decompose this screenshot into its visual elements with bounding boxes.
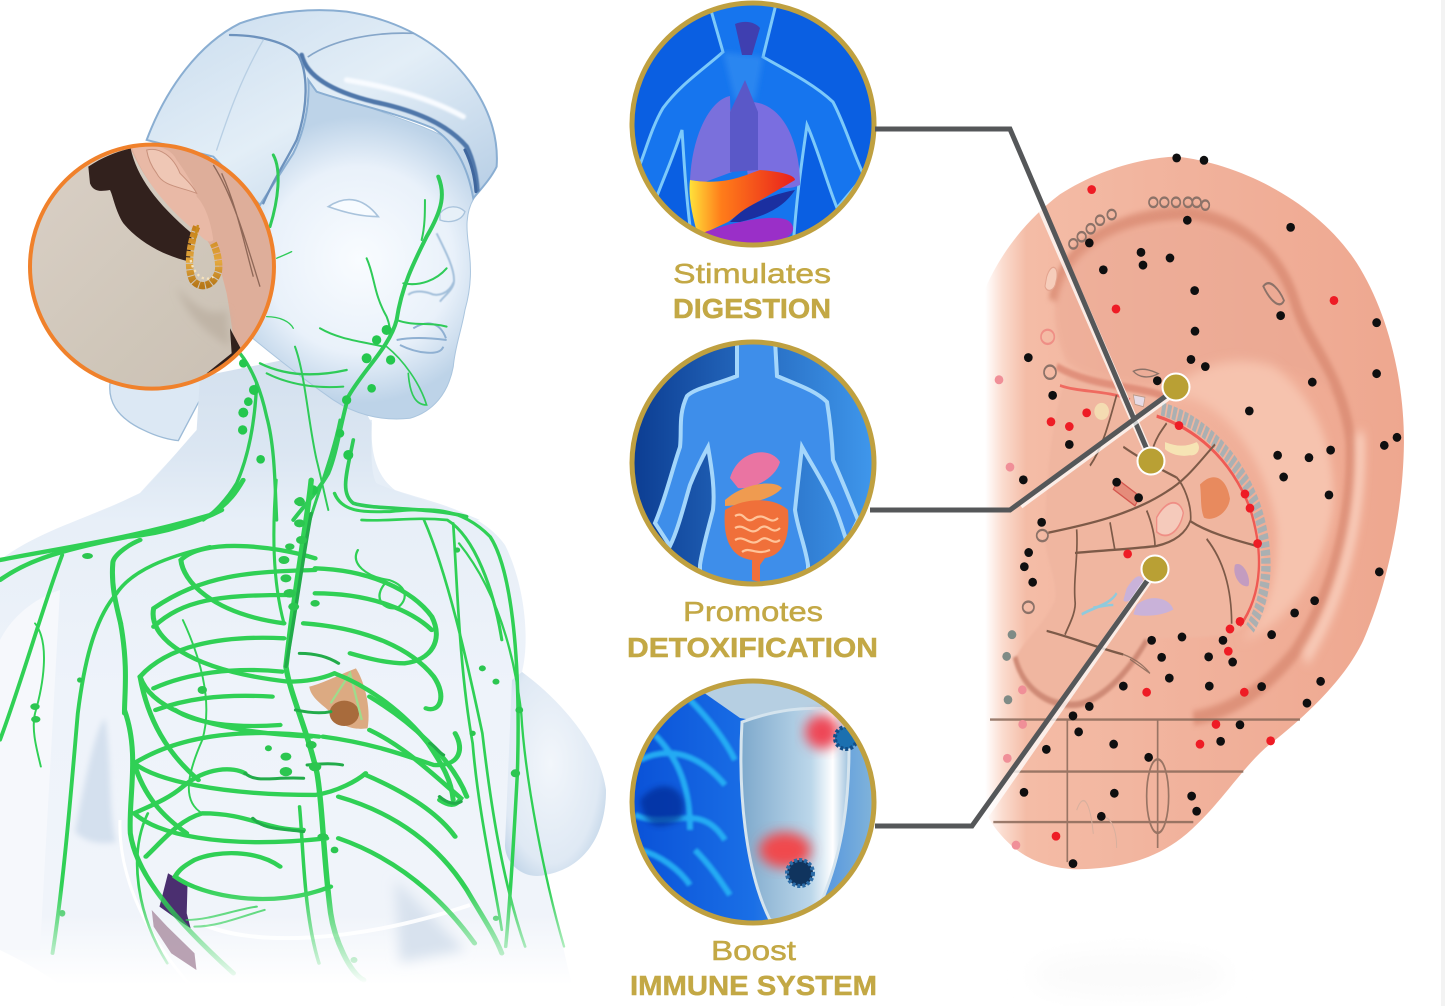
connector: detoxification to ear [870,393,1170,510]
virus particles [787,860,813,886]
outer ear in inset [132,145,213,242]
throat [735,22,760,55]
heading: Boost IMMUNE SYSTEM: IMMUNE SYSTEM [630,970,877,1001]
concha lower shade [1015,640,1147,705]
ear shape [970,157,1404,869]
face [247,67,474,419]
concha [1015,376,1264,706]
figure body silhouette [0,400,606,985]
heart [309,668,369,729]
heading: Promotes DETOXIFICATION: Promotes [683,596,823,627]
earring photo inset circle [30,143,280,389]
eye [328,200,465,222]
faint lobe sketch [1077,801,1117,848]
red glow [805,715,839,749]
hair [147,10,497,205]
wall shadow [182,297,229,342]
muscular torso strokes [635,700,735,895]
hair fold shadows [217,33,477,203]
ring markers [1023,198,1284,613]
gold ring [632,681,874,923]
heading: Stimulates DIGESTION [673,258,831,324]
torso silhouette [655,340,858,600]
ear acupoint chart [970,153,1404,869]
face and neck lymph nodes [238,325,395,506]
hair lock near neck [207,328,243,373]
gold ring [632,342,874,584]
antihelix body [1163,361,1334,640]
dark green vessel accents [245,513,461,832]
lymphatic network [0,480,564,980]
marker dot: immune point [1142,556,1168,582]
connector: immune system to ear [875,574,1152,826]
faded pink acupoints [995,375,1027,850]
torso silhouette [640,6,862,238]
chest lymph nodes [30,498,523,963]
marker dot: digestion point [1162,374,1190,400]
intestines [725,500,788,582]
medallion: detoxification [632,340,874,600]
chest lymph vessels [0,480,564,980]
illustration: female figure with lymphatic system [0,10,606,985]
ear zone lines [1047,395,1257,654]
heading: Boost IMMUNE SYSTEM: Boost [711,935,796,966]
connector: digestion to ear [875,129,1148,452]
heading: Promotes DETOXIFICATION [627,596,878,663]
stomach and intestines [704,218,794,242]
spleen patch [152,873,196,970]
hair bun behind neck [110,377,203,441]
nose shading [408,233,454,302]
medallion: digestion [632,0,874,250]
dark hair in inset [88,148,192,262]
gold ring [632,3,874,245]
marker dot: detox point [1138,448,1164,474]
medallion: immune system [632,680,874,925]
grey acupoints [1002,630,1016,704]
orange ring [30,145,274,389]
heading: Boost IMMUNE SYSTEM [630,935,877,1001]
heading: Stimulates DIGESTION: Stimulates [673,258,831,289]
face and neck lymph vessels [203,155,467,520]
loose hair strands [213,165,260,287]
heading: Stimulates DIGESTION: DIGESTION [673,293,831,324]
digestive organ markings [1082,395,1249,616]
red acupoints [1047,185,1338,841]
neck skin in inset [130,146,272,348]
helix highlight [1305,433,1360,659]
stomach [730,452,780,488]
red rim line [1157,416,1259,626]
head group [83,10,497,520]
neck glow [723,52,763,100]
helix inner fold shadow [1053,213,1351,718]
lobe grid [990,654,1300,862]
shield [741,708,849,925]
faint cloud below ear [1030,951,1230,999]
lips [397,323,447,353]
liver [689,170,795,236]
black acupoints [1019,153,1401,868]
lungs [690,96,732,182]
neck [83,350,480,520]
upper fossa [1055,220,1333,390]
heading: Promotes DETOXIFICATION: DETOXIFICATION [627,632,878,663]
antihelix rim beads [1162,409,1266,629]
gold hoop earring [190,225,219,286]
